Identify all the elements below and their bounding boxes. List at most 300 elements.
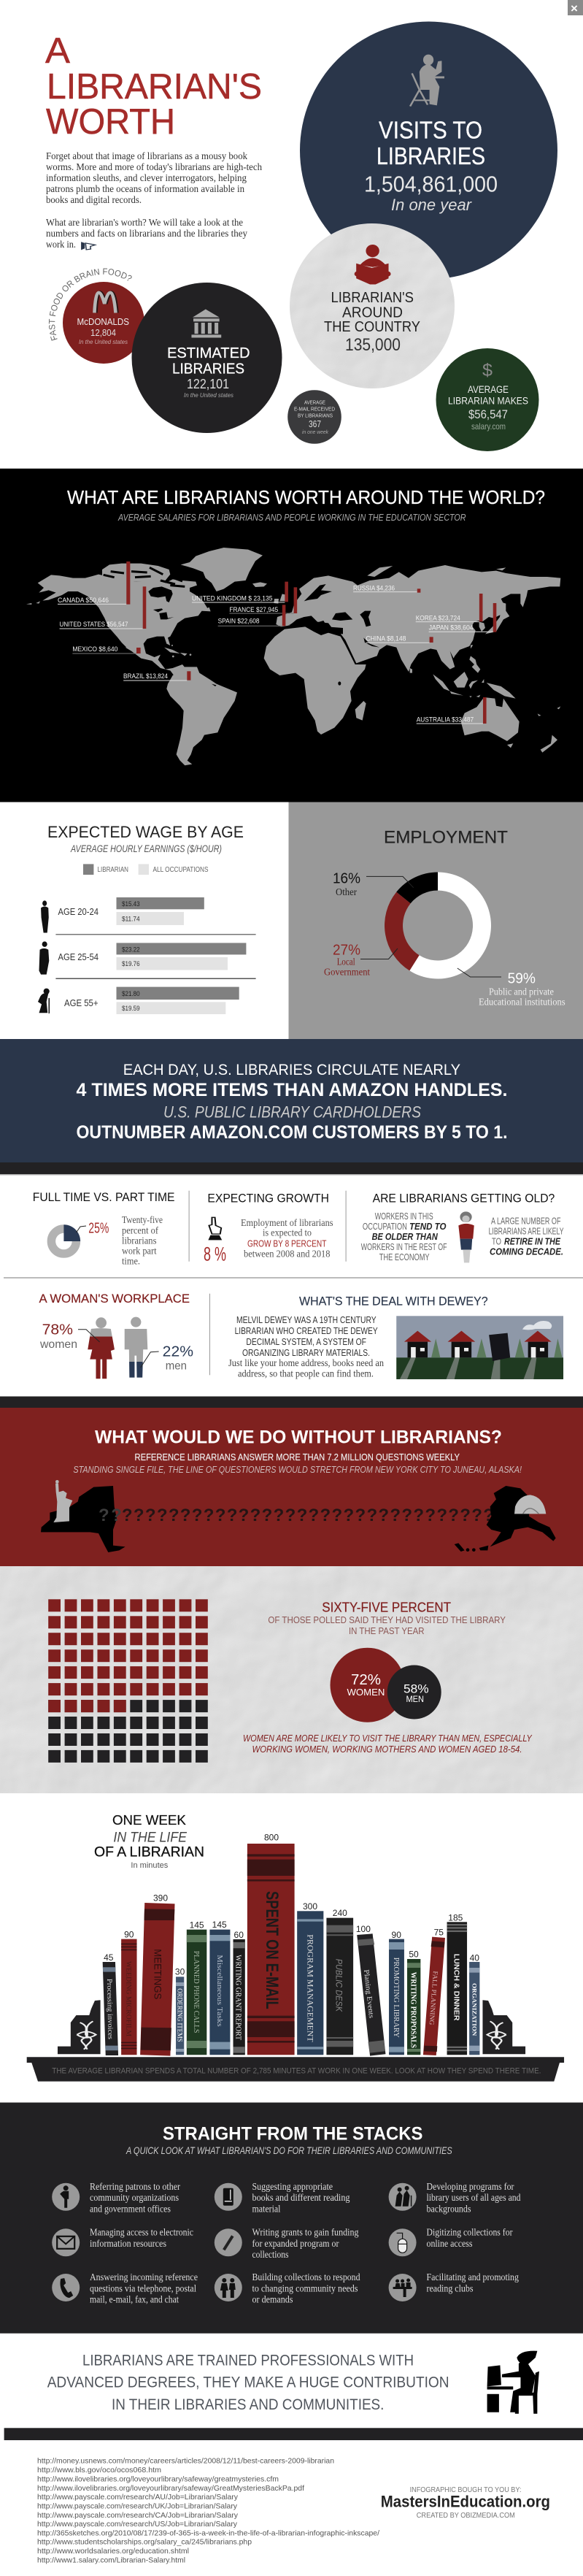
callout: 78% women xyxy=(39,1322,100,1351)
callout: educational institutions 59%: Public and private xyxy=(489,987,554,997)
circle: average librarian makes: salary.com xyxy=(471,421,506,432)
heading: one week: ONE WEEK xyxy=(112,1812,186,1828)
callout: local government 27% xyxy=(324,942,398,978)
callout: local government 27%: 27% xyxy=(333,942,360,958)
book titles: Processing invoices xyxy=(105,1979,114,2039)
pie chart 25% xyxy=(51,1224,80,1254)
heading: one week: IN THE LIFE xyxy=(113,1830,187,1845)
minute values: 40 xyxy=(470,1953,479,1963)
minute values: 145 xyxy=(190,1920,204,1931)
circle: mcdonalds: McDONALDS xyxy=(77,316,129,327)
intro text: patrons plumb the oceans of information available in xyxy=(46,184,244,195)
book titles: ORDERING ITEMS xyxy=(177,1988,184,2042)
bars: age 20-24: $11.74 xyxy=(122,916,140,923)
minute values: 185 xyxy=(448,1913,463,1923)
book titles: ORGANIZATION xyxy=(471,1983,477,2036)
intro text: numbers and facts on librarians and the libraries they xyxy=(46,229,247,239)
source list: http://www.ilovelibraries.org/loveyourlibrary/safeway/GreatMysteriesBackPa.pdf xyxy=(37,2484,304,2493)
minute values: 50 xyxy=(409,1950,419,1960)
icon: pointing hand xyxy=(81,242,95,250)
text: older workers xyxy=(361,1211,447,1262)
shelf: THE AVERAGE LIBRARIAN SPENDS A TOTAL NUMBER OF 2,785 MINUTES AT WORK IN ONE WEEK. LOOK AT HOW THEY SPEND THERE TIME. xyxy=(52,2066,541,2075)
heading: stacks: STRAIGHT FROM THE STACKS xyxy=(163,2124,422,2144)
text: writing grants: collections xyxy=(252,2250,289,2261)
source list: http://www.worldsalaries.org/education.shtml xyxy=(37,2547,189,2556)
icon: reader with red book xyxy=(355,245,391,285)
text: digitizing collections: Digitizing collections for xyxy=(426,2227,513,2239)
map: new york state xyxy=(41,1480,126,1552)
source list: http://www.bls.gov/oco/ocos068.htm xyxy=(37,2466,161,2475)
world map: eurasia, africa and oceania xyxy=(264,565,560,753)
source list xyxy=(37,2456,379,2564)
bars: age 55+: $19.59 xyxy=(122,1005,140,1013)
text: part time xyxy=(122,1215,163,1268)
map labels: AUSTRALIA $33,487 xyxy=(417,716,474,724)
text: suggesting books xyxy=(252,2182,350,2215)
minute values: 60 xyxy=(234,1930,244,1940)
source list: http://www.studentscholarships.org/salary_ca/245/librarians.php xyxy=(37,2537,252,2546)
panel: deal with dewey xyxy=(228,1294,563,1379)
banner: amazon comparison: EACH DAY, U.S. LIBRARIES CIRCULATE NEARLY xyxy=(123,1062,460,1078)
panel: are librarians getting old xyxy=(361,1192,564,1262)
text: part time: Twenty-five xyxy=(122,1215,163,1226)
intro text xyxy=(46,151,262,250)
callout: 78% women: women xyxy=(39,1338,77,1351)
book titles: Miscellaneous Tasks xyxy=(215,1955,223,2027)
icon: telephone xyxy=(52,2274,80,2301)
minute values: 90 xyxy=(124,1929,134,1939)
text: dewey: MELVIL DEWEY WAS A 19TH CENTURY xyxy=(236,1315,377,1325)
circle: average librarian makes: LIBRARIAN MAKES xyxy=(448,396,528,406)
text: older workers: WORKERS IN THIS xyxy=(375,1211,433,1222)
bubble: 72% women: WOMEN xyxy=(347,1687,385,1698)
credit block: CREATED BY OBIZMEDIA.COM xyxy=(417,2512,515,2520)
icon: couple xyxy=(215,2274,242,2301)
circle: email received: in one week xyxy=(302,429,329,435)
subheading: stretch: STANDING SINGLE FILE, THE LINE OF QUESTIONERS WOULD STRETCH FROM NEW YORK CITY TO JUNEAU, ALASKA! xyxy=(73,1465,522,1475)
subheading: reference questions: REFERENCE LIBRARIANS ANSWER MORE THAN 7.2 MILLION QUESTIONS WEEKLY xyxy=(134,1452,460,1463)
bars: age 55+ xyxy=(64,987,239,1014)
book titles: FALL PLANNING xyxy=(428,1971,439,2025)
circle: email received: E-MAIL RECEIVED xyxy=(294,406,335,412)
intro text: work in. xyxy=(46,239,76,250)
circle: mcdonalds: In the United states xyxy=(79,338,128,345)
circle: visits to libraries xyxy=(300,22,557,279)
panel: sixty-five percent xyxy=(0,1566,583,1793)
text: reading clubs: reading clubs xyxy=(426,2283,473,2294)
source list: http://www1.salary.com/Librarian-Salary.html xyxy=(37,2556,185,2564)
heading: growth: EXPECTING GROWTH xyxy=(207,1192,329,1205)
intro text: Forget about that image of librarians as a mousy book xyxy=(46,151,247,162)
icon: reading club xyxy=(389,2274,417,2301)
circle: email received: 367 xyxy=(309,418,321,429)
minute values: 90 xyxy=(392,1930,401,1940)
text: older workers: TEND TO xyxy=(409,1222,447,1232)
text: dewey: Just like your home address, books need an xyxy=(228,1358,384,1369)
map labels: MEXICO $8,640 xyxy=(72,645,117,653)
source list: http://money.usnews.com/money/careers/articles/2008/12/11/best-careers-2009-librarian xyxy=(37,2456,334,2465)
minute values: 100 xyxy=(356,1924,371,1934)
text: suggesting books: Suggesting appropriate xyxy=(252,2182,333,2193)
text: women more likely xyxy=(243,1733,533,1755)
map labels: KOREA $23,724 xyxy=(416,614,460,622)
panel: world salaries xyxy=(0,468,583,802)
source list: http://www.payscale.com/research/US/Job=Librarian/Salary xyxy=(37,2520,238,2529)
panel: expected wage by age xyxy=(38,823,256,1014)
credit block xyxy=(381,2486,550,2520)
minute values: 145 xyxy=(212,1920,227,1930)
text: part time: work part xyxy=(122,1246,157,1257)
callout: 25%: 25% xyxy=(88,1220,109,1236)
text: digitizing collections xyxy=(426,2227,513,2250)
subheading: wage: AVERAGE HOURLY EARNINGS ($/HOUR) xyxy=(70,843,222,854)
icon: golden arches xyxy=(94,293,117,313)
circle: estimated libraries: LIBRARIES xyxy=(172,361,244,377)
text: referring patrons xyxy=(90,2182,180,2215)
panel: what would we do without librarians xyxy=(0,1396,583,1566)
callout: 22% men: men xyxy=(166,1360,187,1373)
text: older workers: OCCUPATION xyxy=(363,1222,407,1232)
text: dewey xyxy=(228,1315,384,1379)
text: developing programs: Developing programs for xyxy=(426,2182,514,2193)
circle: visits to libraries: VISITS TO xyxy=(379,117,482,143)
callout: other 16%: 16% xyxy=(333,871,360,887)
text: reading clubs: Facilitating and promoting xyxy=(426,2272,519,2283)
icon: envelope xyxy=(52,2228,80,2256)
icon: mouse xyxy=(389,2228,417,2256)
text: polled: OF THOSE POLLED SAID THEY HAD VISITED THE LIBRARY xyxy=(268,1614,506,1625)
circle: estimated libraries: ESTIMATED xyxy=(167,345,250,361)
minute values: 30 xyxy=(175,1967,185,1977)
question mark line: ???????????????????????????????? xyxy=(122,1506,494,1525)
text: answering questions: Answering incoming reference xyxy=(90,2272,198,2283)
book titles: WRITING PROPOSALS xyxy=(409,1972,417,2048)
figures: woman and man xyxy=(88,1317,147,1379)
text: growth: Employment of librarians xyxy=(241,1218,333,1229)
circle: average librarian makes: $56,547 xyxy=(468,408,508,421)
text: reading clubs xyxy=(426,2272,519,2294)
illustration: houses and book xyxy=(396,1316,563,1379)
text: developing programs: backgrounds xyxy=(426,2204,471,2215)
source list: http://www.payscale.com/research/UK/Job=Librarian/Salary xyxy=(37,2502,238,2510)
source list: http://www.payscale.com/research/AU/Job=Librarian/Salary xyxy=(37,2493,239,2502)
heading: one week: In minutes xyxy=(131,1861,169,1870)
text: retirement: RETIRE IN THE xyxy=(504,1237,561,1247)
book spines xyxy=(103,1844,479,2056)
circle: librarians around the country: THE COUNTRY xyxy=(324,319,420,335)
text: writing grants: Writing grants to gain funding xyxy=(252,2227,359,2239)
circle: estimated libraries: 122,101 xyxy=(187,377,229,391)
heading: wage: EXPECTED WAGE BY AGE xyxy=(47,823,244,841)
text: dewey: DECIMAL SYSTEM, A SYSTEM OF xyxy=(246,1337,366,1347)
bubble: 58% men: 58% xyxy=(404,1682,429,1695)
bars: age 25-54 xyxy=(58,943,246,970)
circle: email received xyxy=(287,390,341,444)
source list: http://www.payscale.com/research/CA/Job=Librarian/Salary xyxy=(37,2511,239,2520)
intro text: worms. More and more of today's librarians are high-tech xyxy=(46,162,262,173)
text: referring patrons: Referring patrons to other xyxy=(90,2182,180,2193)
circle: mcdonalds: 12,804 xyxy=(90,327,116,338)
text: older workers: BE OLDER THAN xyxy=(372,1232,439,1242)
text: developing programs xyxy=(426,2182,521,2215)
banner: amazon comparison xyxy=(0,1039,583,1176)
map labels: CHINA $8,148 xyxy=(366,635,406,643)
panel: straight from the stacks xyxy=(0,2102,583,2334)
text: dewey: LIBRARIAN WHO CREATED THE DEWEY xyxy=(235,1326,378,1336)
subheading: stacks: A QUICK LOOK AT WHAT LIBRARIAN'S DO FOR THEIR LIBRARIES AND COMMUNITIES xyxy=(126,2144,452,2156)
book titles: PROMOTING LIBRARY xyxy=(392,1958,400,2038)
minute values: 75 xyxy=(434,1928,444,1938)
panel: expecting growth xyxy=(204,1192,333,1265)
text: retirement: TO xyxy=(492,1237,501,1247)
icon: reader on chair xyxy=(410,55,444,107)
text: suggesting books: material xyxy=(252,2204,281,2215)
text: polled: IN THE PAST YEAR xyxy=(349,1625,425,1636)
circle: visits to libraries: 1,504,861,000 xyxy=(364,171,498,197)
circle: estimated libraries xyxy=(131,283,282,433)
text: retirement xyxy=(489,1216,564,1257)
credit block: MastersInEducation.org xyxy=(381,2492,550,2510)
circle: email received: BY LIBRARIANS xyxy=(298,412,333,419)
heading: without librarians: WHAT WOULD WE DO WITHOUT LIBRARIANS? xyxy=(95,1427,502,1447)
heading: one week xyxy=(94,1812,204,1870)
circle: mcdonalds xyxy=(63,282,144,364)
circle: visits to libraries: LIBRARIES xyxy=(377,142,485,169)
circle: estimated libraries: In the United states xyxy=(184,391,234,399)
callout: 78% women: 78% xyxy=(42,1322,73,1338)
panel: one week in the life xyxy=(27,1812,564,2082)
circle: average librarian makes xyxy=(436,348,538,451)
close button: × xyxy=(571,1,578,15)
circle: email received: AVERAGE xyxy=(304,399,325,406)
book titles: Planing Events xyxy=(362,1969,375,2019)
text: building collections: Building collections to respond xyxy=(252,2272,360,2283)
bubble: 72% women: 72% xyxy=(351,1672,381,1688)
bookshelf chart xyxy=(27,1833,564,2082)
heading: workplace: A WOMAN'S WORKPLACE xyxy=(39,1292,190,1306)
title: A xyxy=(45,31,70,71)
text: digitizing collections: online access xyxy=(426,2239,473,2250)
map labels: UNITED STATES $56,547 xyxy=(60,621,128,629)
circle: visits to libraries: In one year xyxy=(391,196,473,214)
panel: employment xyxy=(289,802,583,1039)
intro text: books and digital records. xyxy=(46,195,142,206)
bars: age 25-54: $19.76 xyxy=(122,960,140,968)
text: growth: is expected to xyxy=(263,1228,312,1239)
callout: 22% men xyxy=(141,1343,193,1373)
bars: age 25-54: $23.22 xyxy=(122,946,140,954)
text: developing programs: library users of all ages and xyxy=(426,2193,521,2204)
minute values: 800 xyxy=(264,1833,279,1843)
icon: pointing hand xyxy=(208,1217,222,1240)
circle: librarians around the country: 135,000 xyxy=(345,335,401,355)
intro text: What are librarian's worth? We will take a look at the xyxy=(46,218,243,229)
statement: trained professionals xyxy=(47,2352,449,2413)
text: part time: librarians xyxy=(122,1235,156,1246)
text: answering questions: mail, e-mail, fax, and chat xyxy=(90,2295,179,2306)
bubble: 72% women xyxy=(330,1648,404,1722)
text: part time: percent of xyxy=(122,1225,158,1236)
title xyxy=(45,31,262,142)
book titles: PUBLIC DESK xyxy=(334,1959,343,2012)
callout: other 16% xyxy=(333,871,414,898)
callout: 25% xyxy=(76,1220,109,1236)
question mark over alaska: ? xyxy=(494,1506,505,1525)
text: polled xyxy=(268,1614,506,1636)
text: writing grants: for expanded program or xyxy=(252,2239,339,2250)
legend: LIBRARIAN xyxy=(98,865,128,874)
heading: dewey: WHAT'S THE DEAL WITH DEWEY? xyxy=(299,1294,488,1308)
text: answering questions: questions via telephone, postal xyxy=(90,2283,196,2294)
callout: educational institutions 59%: Educational institutions xyxy=(479,997,565,1008)
icon: adult xyxy=(39,941,49,975)
panel: a woman's workplace xyxy=(39,1292,193,1379)
text: referring patrons: community organizations xyxy=(90,2193,179,2204)
circle: average librarian makes: $ xyxy=(482,361,493,380)
icon: elderly person xyxy=(38,989,50,1013)
text: part time: time. xyxy=(122,1257,140,1268)
minute values: 240 xyxy=(333,1908,347,1918)
heading: getting old: ARE LIBRARIANS GETTING OLD? xyxy=(373,1192,555,1205)
banner: amazon comparison: 4 TIMES MORE ITEMS THAN AMAZON HANDLES. xyxy=(76,1080,508,1100)
bars: age 20-24: AGE 20-24 xyxy=(58,906,99,917)
text: suggesting books: books and different reading xyxy=(252,2193,350,2204)
heading: one week: OF A LIBRARIAN xyxy=(94,1845,204,1860)
bubble: 58% men xyxy=(387,1665,441,1719)
text: women more likely: WORKING WOMEN, WORKING MOTHERS AND WOMEN AGED 18-54. xyxy=(252,1744,522,1755)
title: WORTH xyxy=(46,102,175,142)
text: referring patrons: and government offices xyxy=(90,2204,171,2215)
bookends xyxy=(58,2000,525,2054)
text: building collections xyxy=(252,2272,360,2306)
map labels: FRANCE $27,945 xyxy=(229,606,278,614)
text: women more likely: WOMEN ARE MORE LIKELY TO VISIT THE LIBRARY THAN MEN, ESPECIALLY xyxy=(243,1733,533,1744)
text: growth: GROW BY 8 PERCENT xyxy=(247,1238,326,1249)
footer bar xyxy=(4,2428,583,2440)
circle: librarians around the country xyxy=(290,223,455,388)
text: older workers: THE ECONOMY xyxy=(379,1252,430,1262)
callout: educational institutions 59%: 59% xyxy=(508,971,536,987)
minute values: 45 xyxy=(104,1952,114,1963)
callout: local government 27%: Local xyxy=(337,957,355,968)
circle: average librarian makes: AVERAGE xyxy=(468,384,509,395)
legend: ALL OCCUPATIONS xyxy=(153,865,209,874)
callout: educational institutions 59% xyxy=(457,968,565,1008)
legend xyxy=(83,864,209,875)
world map: americas and greenland xyxy=(26,548,267,765)
statement: trained professionals: ADVANCED DEGREES, THEY MAKE A HUGE CONTRIBUTION xyxy=(47,2374,449,2391)
credit block: INFOGRAPHIC BOUGH TO YOU BY: xyxy=(410,2486,521,2494)
text: managing access: Managing access to electronic xyxy=(90,2227,193,2239)
text: older workers: WORKERS IN THE REST OF xyxy=(361,1242,447,1252)
text: building collections: or demands xyxy=(252,2295,293,2306)
source list: http://www.ilovelibraries.org/loveyourlibrary/safeway/greatmysteries.cfm xyxy=(37,2475,279,2483)
bars: age 20-24 xyxy=(58,897,204,925)
text: managing access xyxy=(90,2227,193,2250)
minute values xyxy=(104,1833,479,1977)
heading: employment: EMPLOYMENT xyxy=(384,828,508,847)
map labels: SPAIN $22,608 xyxy=(218,618,260,626)
donut chart xyxy=(385,872,491,979)
intro text: information sleuths, and clever interrogators, helping xyxy=(46,173,247,184)
subheading: world: AVERAGE SALARIES FOR LIBRARIANS AND PEOPLE WORKING IN THE EDUCATION SECTOR xyxy=(117,512,466,523)
bars: age 55+: AGE 55+ xyxy=(64,997,98,1008)
callout: local government 27%: Government xyxy=(324,967,370,978)
book titles: MEETINGS xyxy=(152,1949,163,1999)
minute values: 390 xyxy=(153,1893,168,1903)
text: answering questions xyxy=(90,2272,198,2306)
statement: trained professionals: IN THEIR LIBRARIES AND COMMUNITIES. xyxy=(112,2396,384,2413)
map: alaska xyxy=(455,1486,556,1552)
circle: librarians around the country: LIBRARIAN'S xyxy=(331,290,414,306)
book titles: LUNCH & DINNER xyxy=(452,1954,460,2021)
icon: book xyxy=(215,2183,242,2211)
book titles: PROGRAM MANAGEMENT xyxy=(305,1934,315,2042)
map labels xyxy=(58,584,474,724)
stat: 8 percent: 8 % xyxy=(204,1243,226,1265)
minute values: 300 xyxy=(303,1901,317,1912)
pictogram: 100 squares xyxy=(48,1599,208,1763)
text: growth xyxy=(241,1218,333,1260)
bars: age 20-24: $15.43 xyxy=(122,900,140,908)
map labels: JAPAN $38,604 xyxy=(429,624,474,632)
book titles: WRITING GRANT REPORT xyxy=(234,1955,242,2040)
circle: librarians around the country: AROUND xyxy=(342,305,403,321)
text: dewey: ORGANIZING LIBRARY MATERIALS. xyxy=(242,1348,370,1358)
heading: sixty-five percent: SIXTY-FIVE PERCENT xyxy=(322,1601,451,1615)
curved label: fast food or brain food: FAST FOOD OR BRAIN FOOD? xyxy=(48,269,132,341)
map labels: UNITED KINGDOM $ 23,135 xyxy=(192,595,273,603)
shelf xyxy=(27,2057,564,2082)
bar markers and leader lines xyxy=(58,561,496,724)
bars: age 55+: $21.80 xyxy=(122,990,140,998)
text: building collections: to changing community needs xyxy=(252,2283,358,2294)
bubble: 58% men: MEN xyxy=(406,1694,424,1704)
source list: http://365sketches.org/2010/08/17/239-of-365-is-a-week-in-the-life-of-a-librarian-infographic-inkscape/ xyxy=(37,2529,379,2537)
icon: temple xyxy=(191,310,221,337)
icon: pencil xyxy=(215,2228,242,2256)
book titles: WEEDING MICROFILM xyxy=(124,1961,131,2037)
banner: amazon comparison: U.S. PUBLIC LIBRARY CARDHOLDERS xyxy=(163,1103,421,1122)
icon: older librarian xyxy=(458,1211,474,1262)
map labels: BRAZIL $13,824 xyxy=(123,672,168,681)
text: writing grants xyxy=(252,2227,359,2261)
text: dewey: address, so that people can find them. xyxy=(238,1368,374,1379)
heading: world: WHAT ARE LIBRARIANS WORTH AROUND THE WORLD? xyxy=(67,486,545,508)
icon: young person xyxy=(41,900,49,933)
panel: full time vs part time xyxy=(33,1190,174,1268)
map labels: CANADA $50,646 xyxy=(58,597,109,605)
close button xyxy=(568,0,583,15)
icon: referring person xyxy=(52,2183,80,2211)
text: growth: between 2008 and 2018 xyxy=(244,1249,330,1260)
icon: elderly couple xyxy=(389,2183,417,2211)
question marks over new york: ?? xyxy=(99,1506,122,1525)
callout: 22% men: 22% xyxy=(163,1343,193,1360)
book titles: SPENT ON E-MAIL xyxy=(262,1891,282,2009)
map labels: RUSSIA $4,236 xyxy=(353,584,395,592)
bars: age 25-54: AGE 25-54 xyxy=(58,951,99,962)
callout: other 16%: Other xyxy=(336,887,357,898)
heading: full time: FULL TIME VS. PART TIME xyxy=(33,1190,174,1204)
icon: girl at computer xyxy=(487,2351,539,2414)
book titles: PLANNED PHONE CALLS xyxy=(192,1951,200,2033)
text: managing access: information resources xyxy=(90,2239,166,2250)
book titles xyxy=(105,1891,477,2048)
text: retirement: COMING DECADE. xyxy=(490,1247,563,1257)
statement: trained professionals: LIBRARIANS ARE TRAINED PROFESSIONALS WITH xyxy=(82,2352,414,2369)
title: LIBRARIAN'S xyxy=(47,67,262,107)
